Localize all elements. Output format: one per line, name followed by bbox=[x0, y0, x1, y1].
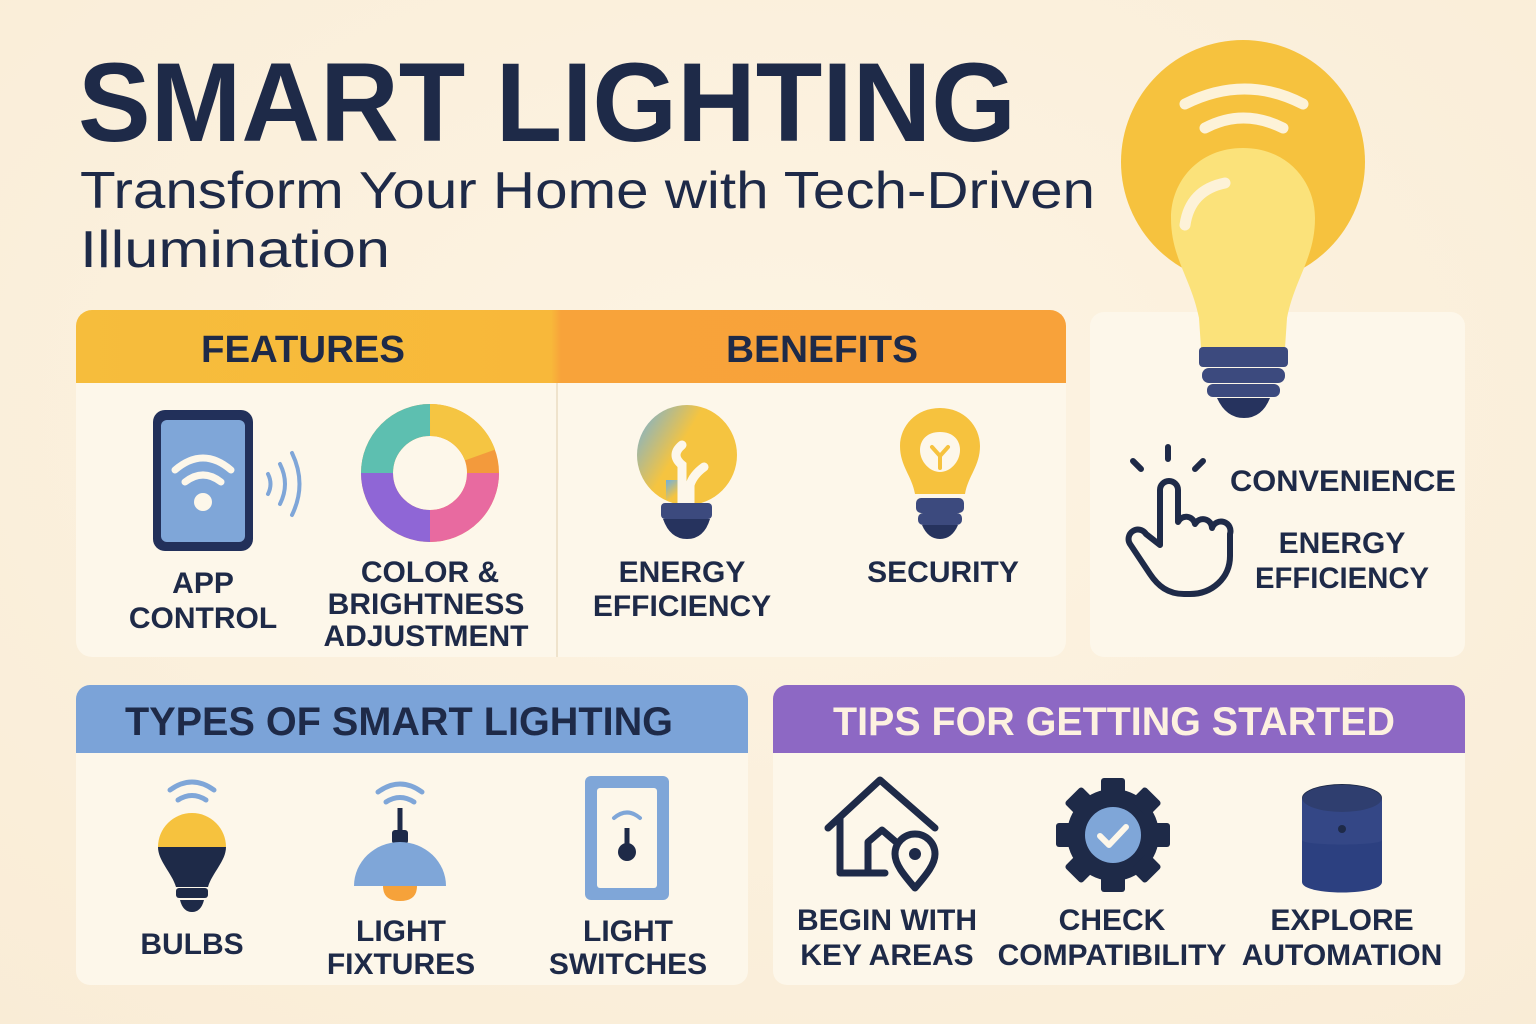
subtitle: Transform Your Home with Tech-Driven bbox=[80, 162, 1095, 220]
text: color brightness: BRIGHTNESS bbox=[328, 588, 524, 621]
text: begin with key areas: KEY AREAS bbox=[800, 939, 974, 972]
icon: energy bulb bbox=[637, 405, 737, 539]
text: light switches bbox=[549, 915, 707, 981]
text: light fixtures: FIXTURES bbox=[327, 948, 475, 981]
text: color brightness bbox=[323, 556, 529, 653]
text: light fixtures bbox=[327, 915, 475, 981]
panel: right convenience bbox=[1090, 312, 1465, 657]
text: energy efficiency: EFFICIENCY bbox=[1255, 562, 1429, 595]
icon: light switch bbox=[585, 776, 669, 900]
text: bulbs: BULBS bbox=[140, 928, 244, 961]
icon: smart speaker bbox=[1302, 784, 1382, 892]
icon: big bulb bbox=[1121, 40, 1365, 418]
icon: house with pin bbox=[828, 780, 935, 888]
text: app control bbox=[129, 567, 277, 635]
panel: features and benefits bbox=[76, 310, 1066, 657]
title: SMART LIGHTING bbox=[78, 40, 1016, 165]
text: energy efficiency bbox=[1255, 527, 1429, 595]
text: light fixtures: LIGHT bbox=[356, 915, 446, 948]
icon: pendant fixture bbox=[354, 784, 446, 901]
text: begin with key areas: BEGIN WITH bbox=[797, 904, 977, 937]
text: energy efficiency: ENERGY bbox=[619, 556, 745, 589]
heading: types: TYPES OF SMART LIGHTING bbox=[125, 700, 673, 744]
text: app control: CONTROL bbox=[129, 602, 277, 635]
text: app control: APP bbox=[172, 567, 234, 600]
icon: gear check bbox=[1056, 778, 1170, 892]
text: explore automation: AUTOMATION bbox=[1242, 939, 1442, 972]
icon: phone app bbox=[153, 410, 300, 551]
text: begin with key areas bbox=[797, 904, 977, 972]
text: energy efficiency bbox=[593, 556, 771, 623]
icon: hand tap bbox=[1129, 447, 1230, 594]
text: check compatibility: COMPATIBILITY bbox=[998, 939, 1226, 972]
heading: benefits: BENEFITS bbox=[726, 329, 918, 371]
text: energy efficiency: EFFICIENCY bbox=[593, 590, 771, 623]
text: convenience: CONVENIENCE bbox=[1230, 465, 1456, 498]
text: check compatibility: CHECK bbox=[1059, 904, 1166, 937]
text: color brightness: ADJUSTMENT bbox=[323, 620, 529, 653]
heading: features: FEATURES bbox=[201, 329, 405, 371]
heading: tips: TIPS FOR GETTING STARTED bbox=[833, 700, 1395, 744]
text: explore automation: EXPLORE bbox=[1270, 904, 1414, 937]
icon: security bulb bbox=[900, 408, 980, 539]
icon: color wheel bbox=[377, 420, 483, 526]
subtitle bbox=[80, 162, 1095, 279]
text: energy efficiency: ENERGY bbox=[1279, 527, 1405, 560]
text: security: SECURITY bbox=[867, 556, 1019, 589]
subtitle: Illumination bbox=[80, 221, 390, 279]
text: color brightness: COLOR & bbox=[361, 556, 499, 589]
icon: bulb bbox=[158, 782, 226, 912]
text: explore automation bbox=[1242, 904, 1442, 972]
text: light switches: LIGHT bbox=[583, 915, 673, 948]
text: light switches: SWITCHES bbox=[549, 948, 707, 981]
panel: types of smart lighting bbox=[76, 685, 748, 985]
text: check compatibility bbox=[998, 904, 1226, 972]
panel: tips for getting started bbox=[773, 685, 1465, 985]
